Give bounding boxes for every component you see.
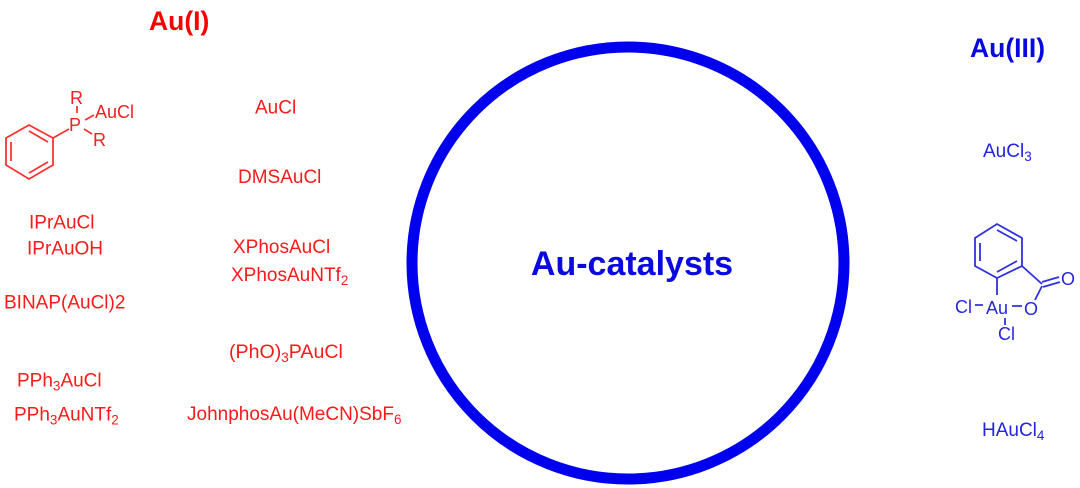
heading: Au(III): Au(III)	[970, 33, 1045, 63]
label: XPhosAuNTf2: 2	[341, 273, 348, 288]
structure: phosphine gold chloride: P	[69, 115, 81, 135]
label: PPh3AuCl: PPh	[17, 370, 53, 392]
label: BINAP(AuCl)2: BINAP(AuCl)2	[4, 292, 125, 314]
structure: gold(III) benzoate complex: O	[1061, 269, 1075, 289]
label: IPrAuOH: IPrAuOH	[27, 238, 103, 260]
label: IPrAuCl: IPrAuCl	[29, 212, 94, 234]
label: PPh3AuNTf2: AuNTf	[57, 404, 112, 426]
label: (PhO)3PAuCl: PAuCl	[289, 341, 343, 363]
structure: phosphine gold chloride	[6, 88, 134, 179]
structure: phosphine gold chloride: AuCl	[95, 102, 134, 122]
structure: gold(III) benzoate complex	[955, 224, 1075, 344]
label: AuCl3: 3	[1024, 149, 1032, 164]
label: PPh3AuNTf2: 3	[50, 412, 57, 428]
label: XPhosAuNTf2: XPhosAuNTf	[231, 265, 341, 286]
label: PPh3AuCl: AuCl	[60, 370, 102, 392]
structure: gold(III) benzoate complex: Cl	[998, 324, 1015, 344]
label: AuCl: AuCl	[255, 98, 296, 118]
label: PPh3AuCl: 3	[53, 378, 60, 394]
label: HAuCl4: 4	[1037, 428, 1045, 443]
label: HAuCl4: HAuCl	[982, 420, 1037, 441]
structure: phosphine gold chloride: R	[93, 130, 106, 150]
label: (PhO)3PAuCl: (PhO)	[229, 341, 281, 363]
label: (PhO)3PAuCl: 3	[281, 350, 289, 365]
structure: gold(III) benzoate complex: Au	[986, 298, 1008, 318]
label: JohnphosAu(MeCN)SbF6: JohnphosAu(MeCN)SbF	[187, 404, 394, 425]
structure: gold(III) benzoate complex: Cl	[955, 297, 972, 317]
label: PPh3AuNTf2: 2	[111, 412, 119, 428]
catalyst circle	[412, 47, 844, 479]
label: AuCl3: AuCl	[983, 141, 1024, 162]
label: JohnphosAu(MeCN)SbF6: 6	[394, 412, 402, 427]
structure: phosphine gold chloride: R	[70, 88, 83, 108]
label: DMSAuCl: DMSAuCl	[238, 167, 321, 188]
label: XPhosAuCl: XPhosAuCl	[233, 237, 330, 258]
label: PPh3AuNTf2: PPh	[14, 404, 50, 426]
heading: Au(I): Au(I)	[149, 6, 209, 36]
structure: gold(III) benzoate complex: O	[1024, 299, 1038, 319]
circle label: Au-catalysts: Au-catalysts	[531, 245, 733, 283]
